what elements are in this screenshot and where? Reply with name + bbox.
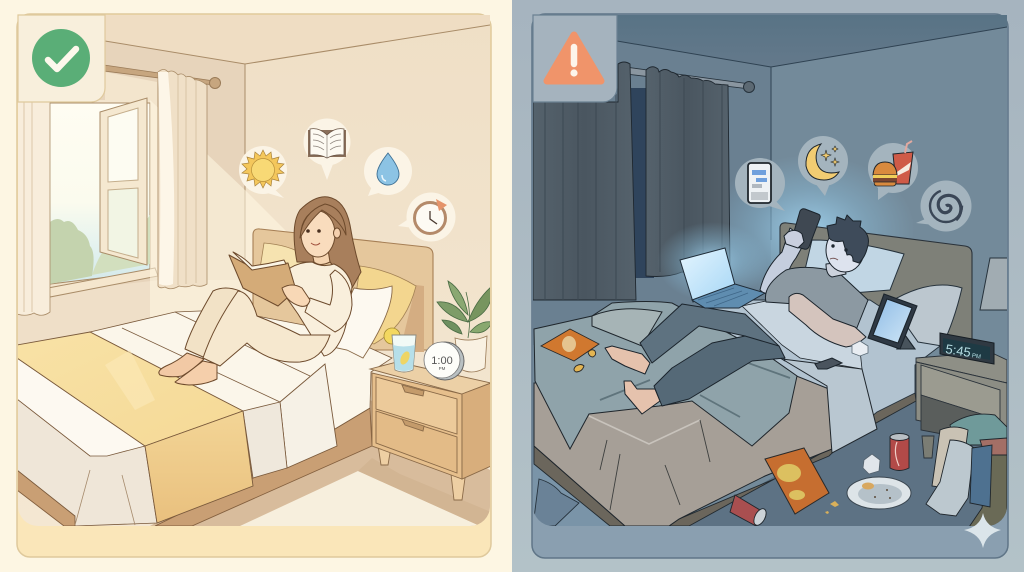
foot upper bbox=[605, 346, 650, 374]
alarm clock digital: 5:45 PM bbox=[945, 341, 982, 362]
panel: unhealthy bedtime habits bbox=[532, 14, 1008, 558]
badge: check mark bbox=[18, 15, 105, 102]
torso shirt bbox=[765, 267, 868, 330]
bed front left bbox=[17, 399, 157, 526]
hair front bbox=[300, 204, 346, 238]
floor bbox=[150, 400, 490, 526]
lower left wall bbox=[18, 281, 150, 344]
shadow floor item bbox=[533, 479, 579, 526]
face details bbox=[306, 229, 321, 233]
window view bbox=[45, 72, 158, 297]
rug bbox=[240, 471, 480, 526]
face details bbox=[831, 244, 848, 252]
raised arm bbox=[760, 228, 806, 295]
left wall bbox=[533, 41, 771, 345]
right curtain bbox=[158, 70, 207, 289]
lower leg bbox=[654, 336, 785, 406]
plate bbox=[847, 477, 911, 509]
light beam bbox=[150, 100, 286, 318]
chip bag on bed bbox=[541, 329, 599, 372]
bed frame side bbox=[669, 393, 916, 526]
badge: warning bbox=[533, 15, 617, 102]
fold lines on sheet bbox=[122, 312, 325, 402]
panel card frame bbox=[17, 14, 491, 557]
bubble: open book bbox=[304, 118, 350, 180]
bubble: moon and stars bbox=[798, 136, 848, 196]
left dark curtain bbox=[533, 62, 636, 300]
bed top white bbox=[17, 358, 145, 456]
bed front creases bbox=[75, 470, 135, 525]
back foot bbox=[159, 353, 204, 377]
alarm clock bbox=[424, 342, 464, 380]
back pillows bbox=[257, 243, 416, 358]
book bbox=[229, 255, 296, 306]
lamp bbox=[980, 258, 1008, 310]
upper leg bbox=[640, 304, 785, 363]
alarm clock digital bbox=[916, 333, 1007, 458]
foot lower bbox=[624, 381, 660, 414]
sleeve arm bbox=[305, 270, 352, 332]
curtain rod bbox=[618, 66, 754, 92]
bubble: phone bbox=[735, 158, 785, 211]
nightstand bbox=[370, 362, 491, 500]
bed fold highlight bbox=[589, 416, 700, 444]
floor bbox=[690, 393, 1007, 526]
room corner lines bbox=[105, 25, 490, 290]
room corner lines bbox=[617, 27, 1007, 240]
forearm bbox=[789, 293, 866, 347]
mattress top bbox=[700, 300, 940, 449]
bubble: burger and soda bbox=[868, 141, 918, 200]
head bbox=[826, 228, 864, 272]
left floor wedge bbox=[533, 462, 610, 526]
ear bbox=[334, 228, 340, 238]
watermark sparkle bbox=[964, 513, 1001, 548]
soda can upright bbox=[890, 434, 909, 470]
tablet bbox=[868, 294, 917, 349]
panel: healthy bedtime routine bbox=[17, 14, 492, 557]
bubble: sun bbox=[239, 146, 287, 198]
white blanket fold front bbox=[280, 364, 337, 468]
phone on bed bbox=[815, 358, 842, 369]
left curtain bbox=[17, 100, 50, 315]
paper ball on bed bbox=[852, 341, 868, 356]
fallen soda can bbox=[730, 495, 769, 527]
head bbox=[301, 211, 335, 257]
open casement bbox=[100, 98, 147, 265]
bright bedroom scene bbox=[17, 15, 492, 526]
lemon water glass bbox=[384, 328, 416, 372]
nightstand bbox=[916, 352, 1007, 458]
page background: left half bbox=[0, 0, 512, 572]
alarm clock: 1:00 bbox=[431, 355, 453, 367]
neck bbox=[826, 262, 846, 277]
bed frame corner bbox=[17, 470, 76, 526]
page background: right half bbox=[512, 0, 1024, 572]
right dark curtain bbox=[646, 67, 730, 277]
bed frame corner bbox=[534, 446, 625, 526]
pillow behind head bbox=[804, 240, 904, 294]
ceiling bbox=[18, 15, 490, 64]
paper ball on floor bbox=[863, 454, 880, 474]
neck bbox=[312, 252, 330, 265]
laptop glow bbox=[657, 222, 767, 302]
spiky hair bbox=[827, 215, 868, 263]
rumpled duvet bbox=[534, 302, 797, 449]
man lying on bed bbox=[605, 209, 868, 414]
clothes pile bbox=[926, 414, 1007, 530]
woman reading bbox=[159, 197, 361, 385]
right pillow bbox=[890, 285, 962, 346]
mattress top bbox=[90, 310, 392, 478]
right wall bbox=[533, 15, 1007, 526]
bubble: spiral bbox=[916, 180, 972, 232]
sheet on chest bbox=[742, 296, 862, 369]
front foot bbox=[175, 361, 217, 385]
sill bbox=[48, 268, 158, 297]
hanging sheet bbox=[782, 359, 877, 453]
curtain rod bbox=[104, 65, 220, 88]
alarm clock: PM bbox=[439, 366, 446, 371]
chip bag on floor bbox=[765, 448, 829, 514]
dark bedroom scene bbox=[533, 15, 1008, 530]
sweater torso bbox=[284, 262, 352, 356]
left wall bbox=[100, 42, 244, 285]
screen glow bbox=[705, 155, 915, 305]
hair back bbox=[294, 197, 361, 288]
headboard lower shade bbox=[404, 285, 424, 352]
back leg bbox=[185, 288, 240, 357]
dark window bbox=[630, 88, 654, 278]
hand bbox=[282, 285, 310, 306]
panel card frame bbox=[532, 14, 1008, 558]
bubble: water drop bbox=[364, 147, 412, 196]
bed front creases bbox=[600, 420, 710, 510]
bed frame side bbox=[155, 408, 372, 526]
phone in hand bbox=[791, 209, 820, 249]
crumbs bbox=[825, 501, 839, 514]
ceiling bbox=[533, 15, 1007, 67]
rug shadow bbox=[358, 458, 491, 526]
plant bbox=[437, 281, 492, 372]
hand on phone bbox=[784, 230, 804, 248]
bed front bbox=[534, 373, 832, 526]
yellow throw blanket bbox=[17, 332, 253, 523]
white band front bbox=[243, 402, 287, 478]
headboard bbox=[780, 223, 972, 345]
headboard bbox=[253, 229, 433, 350]
right wall bbox=[18, 15, 490, 526]
laptop bbox=[680, 248, 765, 308]
bubble: clock bbox=[398, 192, 456, 242]
front leg and thigh bbox=[203, 291, 330, 366]
